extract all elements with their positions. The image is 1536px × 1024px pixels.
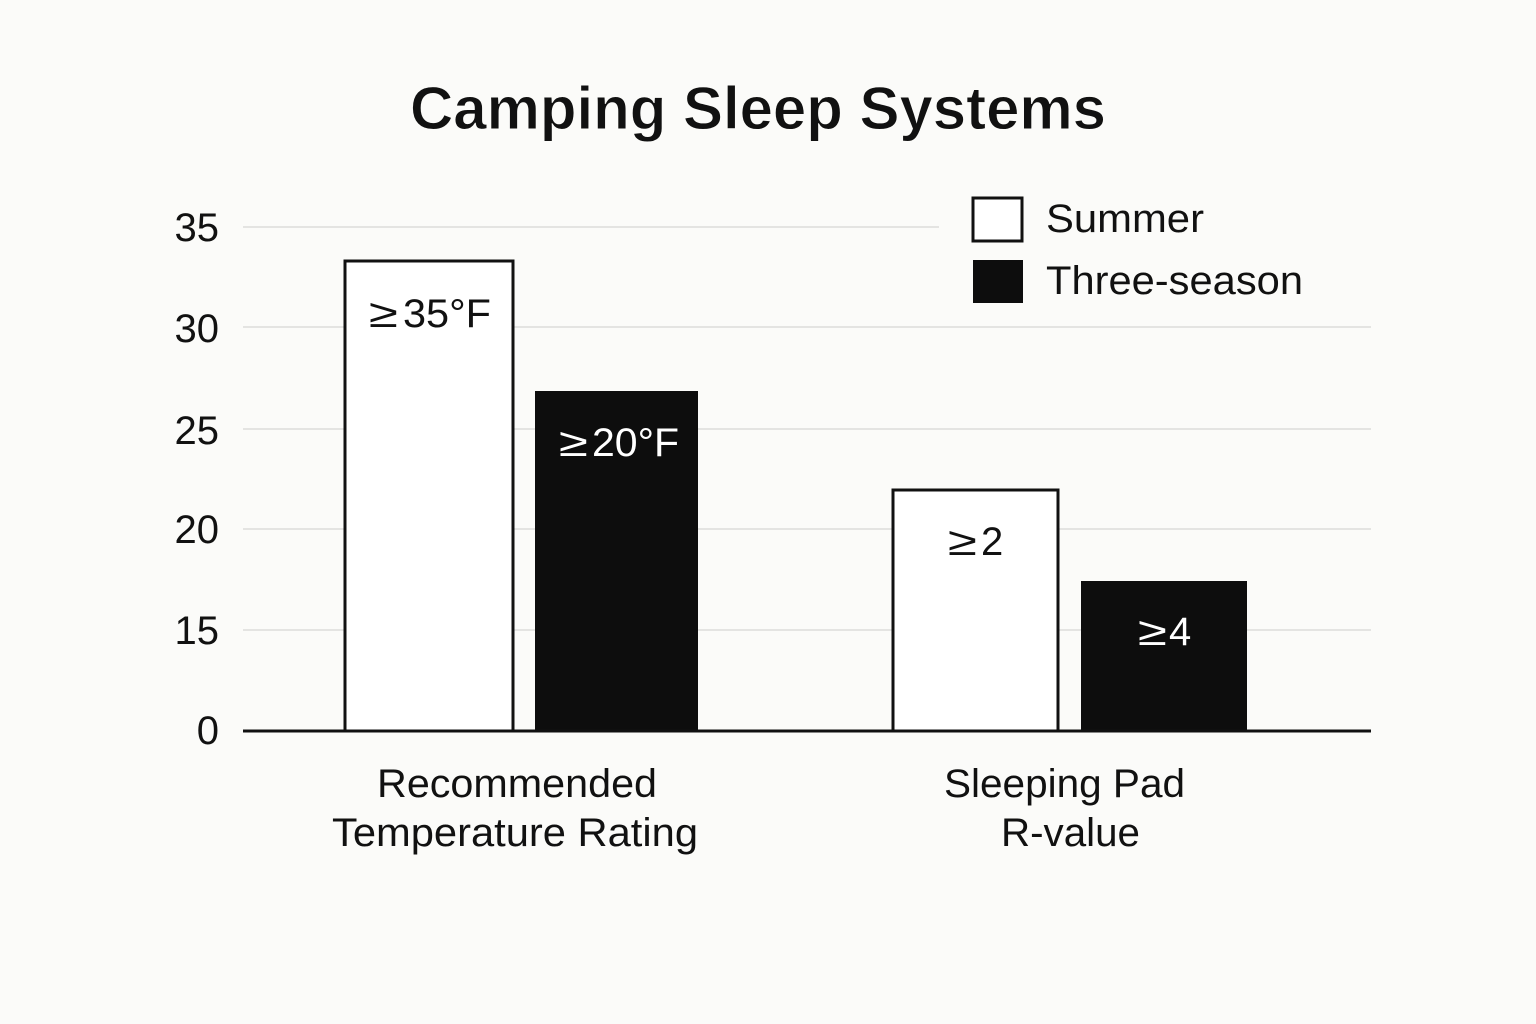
y axis labels (174, 206, 219, 753)
bar: temperature summer: ≥ (369, 292, 398, 336)
bar: temperature summer: 35°F (403, 292, 491, 336)
category label: R-value (944, 762, 1185, 855)
bar: R-value summer (893, 490, 1058, 731)
bar: R-value summer: 2 (981, 520, 1003, 564)
legend: summer (973, 197, 1204, 241)
y axis labels: 15 (174, 609, 219, 653)
bar: temperature three-season (535, 391, 698, 731)
legend: summer: Summer (1046, 197, 1204, 241)
bar: temperature three-season: ≥ (559, 421, 588, 465)
bar: R-value summer: ≥ (948, 520, 977, 564)
y axis labels: 30 (174, 307, 219, 351)
bar: temperature three-season: 20°F (592, 421, 679, 465)
category label: R-value: R-value (1001, 811, 1140, 855)
y axis labels: 20 (174, 508, 219, 552)
title: Camping Sleep Systems (410, 75, 1106, 142)
category label: temperature (332, 762, 698, 855)
x axis line (243, 730, 1371, 732)
y axis labels: 35 (174, 206, 219, 250)
bar: R-value three-season: 4 (1169, 610, 1191, 654)
bar: temperature summer (345, 261, 513, 731)
category label: R-value: Sleeping Pad (944, 762, 1185, 806)
y axis labels: 0 (197, 709, 219, 753)
bar: R-value three-season (1081, 581, 1247, 731)
category label: temperature: Temperature Rating (332, 811, 698, 855)
legend (973, 197, 1303, 303)
bar: R-value three-season: ≥ (1138, 610, 1167, 654)
legend: three-season: Three-season (1046, 259, 1303, 303)
y axis labels: 25 (174, 409, 219, 453)
category label: temperature: Recommended (377, 762, 657, 806)
